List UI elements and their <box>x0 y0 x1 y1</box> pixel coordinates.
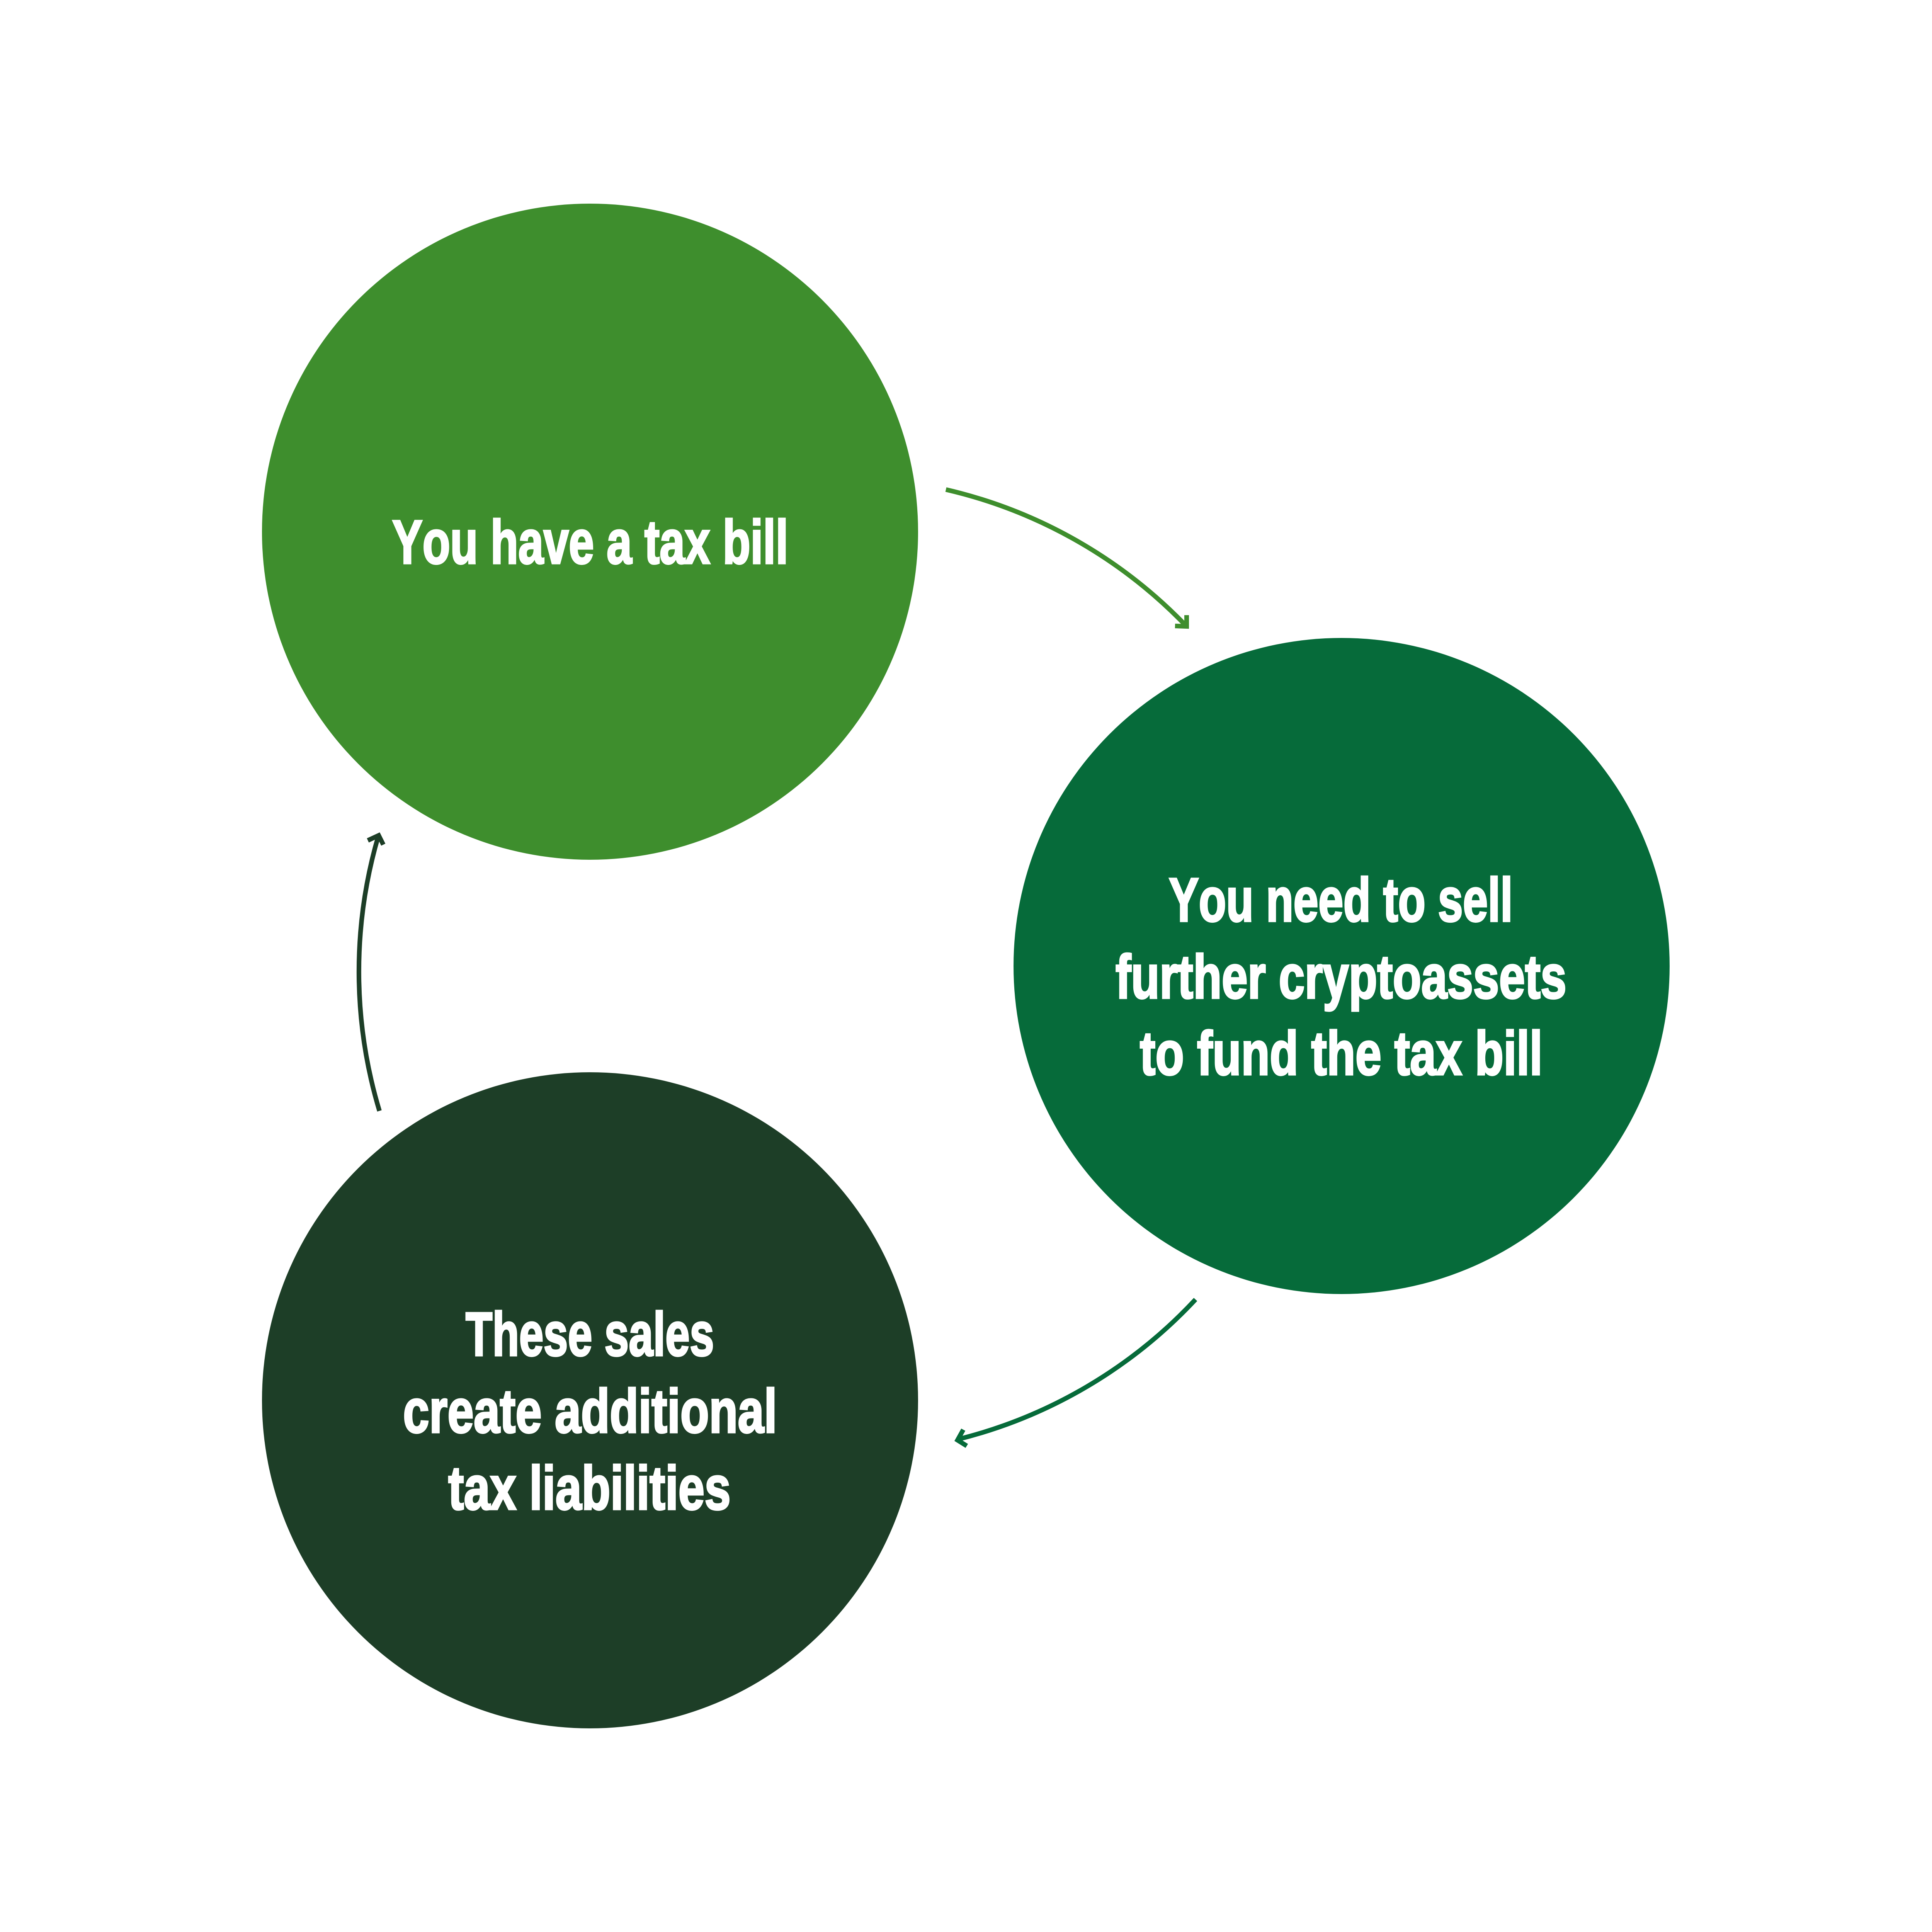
text block: these sales create additional tax liabilities: tax liabilities <box>448 1453 731 1522</box>
text: you have a tax bill: You have a tax bill <box>392 507 788 577</box>
text block: you need to sell further cryptoassets to fund the tax bill <box>1116 865 1566 1088</box>
arrow: top circle to right circle <box>946 490 1187 626</box>
text block: these sales create additional tax liabilities: These sales <box>466 1299 714 1369</box>
circle: light green <box>262 204 918 860</box>
circle: dark green <box>262 1072 918 1728</box>
panel: you have a tax bill <box>262 204 918 860</box>
panel: you need to sell further cryptoassets <box>1014 638 1670 1294</box>
circle: mid green <box>1014 638 1670 1294</box>
panel: these sales create additional tax liabilities <box>262 1072 918 1728</box>
text block: these sales create additional tax liabilities <box>403 1299 777 1522</box>
arrow: bottom circle to top circle <box>359 835 383 1111</box>
text block: you need to sell further cryptoassets to fund the tax bill: You need to sell <box>1169 865 1513 934</box>
arrow: right circle to bottom circle <box>957 1299 1196 1446</box>
text block: you need to sell further cryptoassets to fund the tax bill: further cryptoassets <box>1116 942 1566 1011</box>
text block: these sales create additional tax liabilities: create additional <box>403 1376 777 1446</box>
text block: you need to sell further cryptoassets to fund the tax bill: to fund the tax bill <box>1140 1019 1543 1088</box>
